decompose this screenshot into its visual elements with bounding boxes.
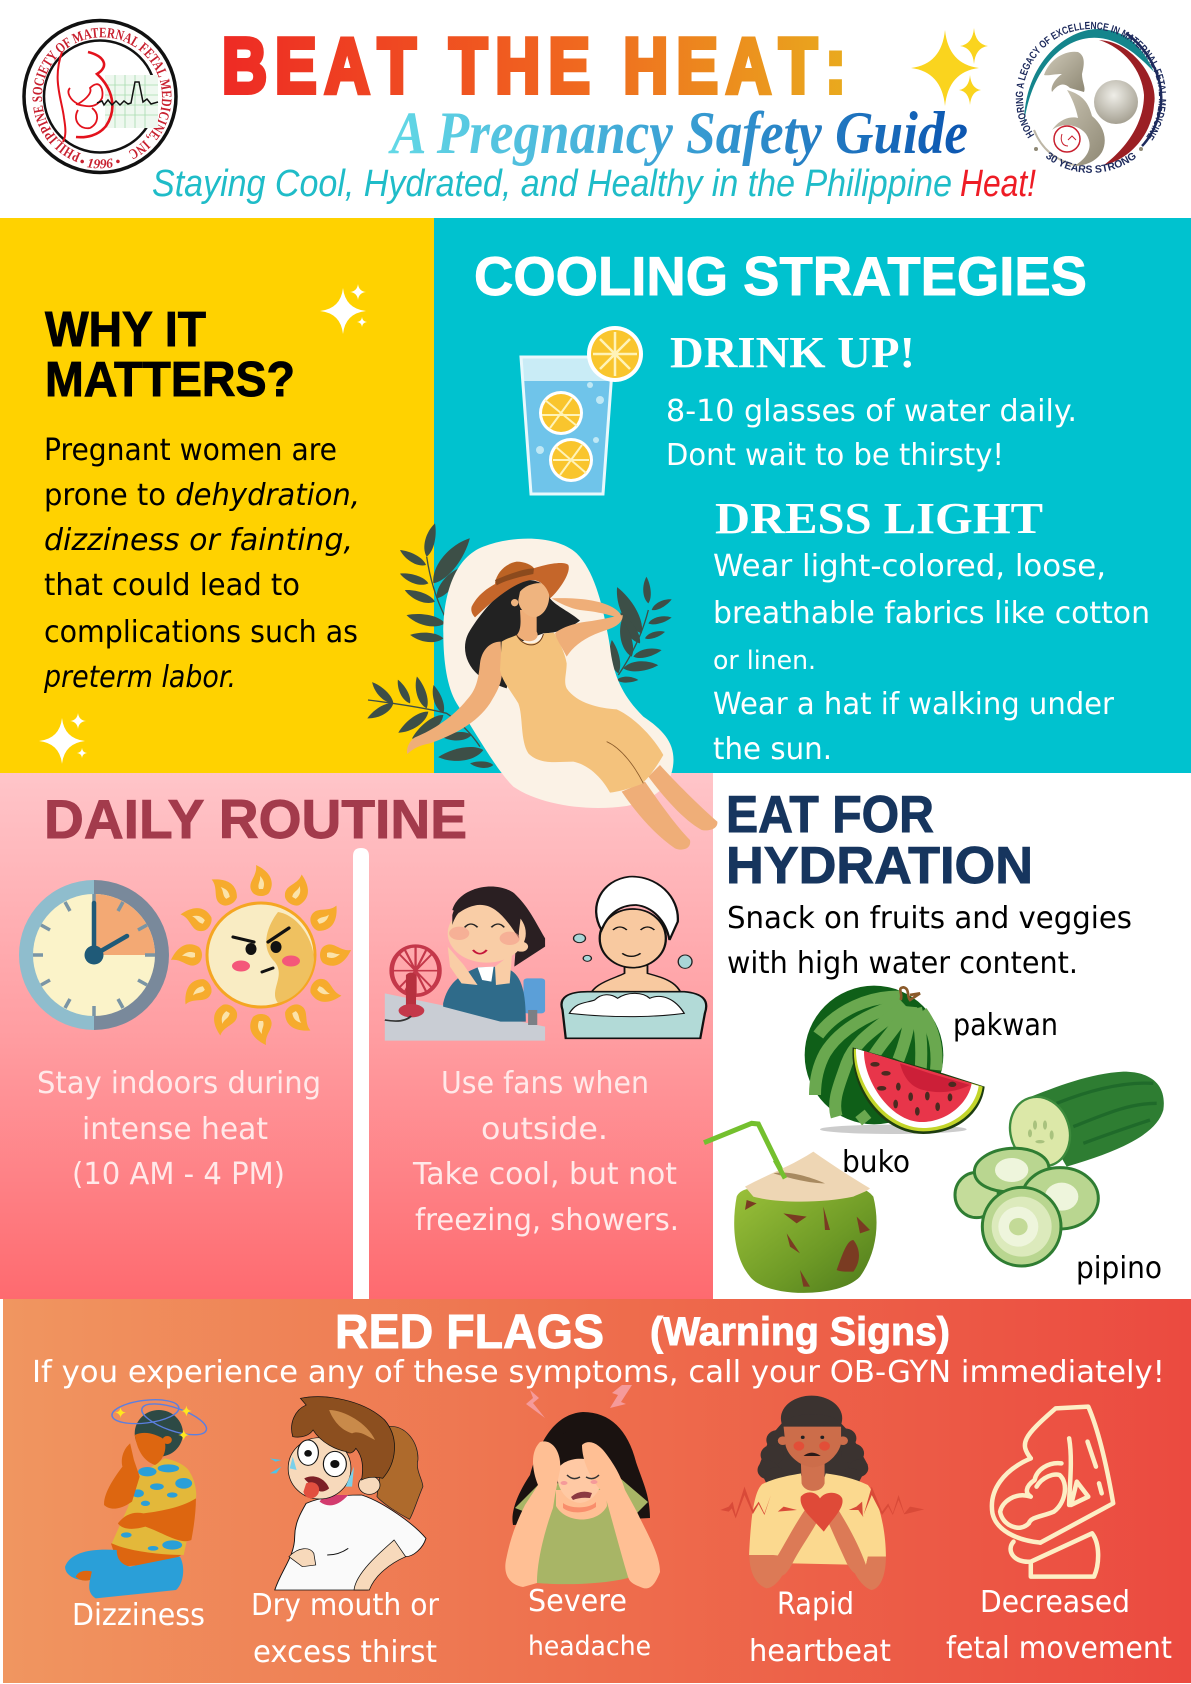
- heading: dress light: DRESS LIGHT: [715, 494, 1043, 543]
- panel: daily routine: [19, 788, 706, 1299]
- label: rapid heartbeat: heartbeat: [749, 1634, 891, 1669]
- icon: pregnant belly with fetus: [992, 1407, 1113, 1577]
- text: snack on fruits: [727, 901, 1132, 981]
- logo: 30 years strong: 30 YEARS STRONG: [1046, 152, 1136, 173]
- label: pipino: pipino: [1076, 1251, 1162, 1286]
- text: dress light body: the sun.: [713, 732, 832, 767]
- illustration: rapid heartbeat figure: [720, 1396, 924, 1590]
- text: use fans: freezing, showers.: [415, 1203, 679, 1238]
- text: why it matters body: Pregnant women are: [44, 433, 337, 468]
- text: why it matters body: preterm labor.: [43, 660, 236, 695]
- heading: eat for hydration: [726, 786, 1033, 895]
- panel: red flags: [32, 1306, 1172, 1670]
- illustration: coconut: [704, 1123, 877, 1293]
- illustration: woman with fan at desk: [385, 887, 545, 1041]
- label: dry mouth: excess thirst: [253, 1635, 437, 1670]
- text: use fans: outside.: [481, 1112, 608, 1147]
- label: dizziness: Dizziness: [72, 1598, 205, 1633]
- label: decreased fetal movement: fetal movement: [946, 1631, 1172, 1666]
- illustration: severe headache figure: [505, 1385, 660, 1588]
- illustration: cucumber: [955, 1072, 1164, 1266]
- text: stay indoors: Stay indoors during: [37, 1066, 321, 1101]
- heading: daily routine: DAILY ROUTINE: [44, 788, 467, 850]
- text: dress light body: breathable fabrics like cotton: [713, 596, 1150, 631]
- heading: eat for hydration: EAT FOR: [726, 786, 934, 844]
- label: decreased fetal movement: [946, 1585, 1172, 1666]
- text: stay indoors: (10 AM - 4 PM): [72, 1157, 285, 1192]
- panel: why it matters: [39, 284, 367, 764]
- logo: Philippine Society of Maternal Fetal Medicine: PHILIPPINE SOCIETY OF MATERNAL FETAL MEDICINE, INC: [32, 28, 172, 162]
- icon: clock: [19, 880, 169, 1030]
- tagline accent: Heat!: [960, 163, 1036, 205]
- logo: 30 years strong: HONORING A LEGACY OF EXCELLENCE IN MATERNAL-FETAL MEDICINE: [1016, 22, 1166, 141]
- text: use fans: Use fans when: [441, 1066, 649, 1101]
- heading: drink up: DRINK UP!: [670, 328, 915, 377]
- heading: why it matters: WHY IT: [45, 303, 206, 357]
- panel: eat for hydration: [704, 786, 1164, 1293]
- illustration: dry mouth figure: [270, 1397, 426, 1590]
- heading: why it matters: MATTERS?: [45, 353, 295, 407]
- illustration: relaxing woman with leaves: [366, 522, 717, 850]
- heading: warning signs: (Warning Signs): [650, 1310, 950, 1354]
- leaves: [366, 522, 673, 769]
- icon: angry sun: [171, 865, 351, 1045]
- panel: red flags background: [3, 1299, 1191, 1683]
- label: severe headache: headache: [528, 1631, 651, 1662]
- icon: yellow sparkles: [911, 28, 988, 106]
- panel: cooling strategies background: [434, 218, 1191, 773]
- label: dry mouth: [251, 1588, 440, 1670]
- label: pakwan: pakwan: [953, 1008, 1058, 1043]
- text: drink up body: [666, 394, 1077, 473]
- dress: [500, 633, 663, 793]
- panel: daily routine background: [0, 773, 713, 1299]
- text: drink up body: 8-10 glasses of water daily.: [666, 394, 1077, 429]
- text: dress light body: or linen.: [713, 646, 816, 676]
- label: rapid heartbeat: Rapid: [777, 1587, 854, 1622]
- text: why it matters body: that could lead to: [44, 568, 300, 603]
- header: [22, 18, 1166, 205]
- hat: [495, 562, 534, 586]
- text: drink up body: Dont wait to be thirsty!: [666, 438, 1004, 473]
- illustration: woman in bath: [562, 877, 706, 1038]
- raised arm: [552, 598, 623, 657]
- illustration: watermelon: [805, 986, 985, 1134]
- text: use fans: [412, 1066, 679, 1238]
- text: stay indoors: [37, 1066, 321, 1192]
- illustration: dizziness figure: [65, 1396, 211, 1598]
- panel: why it matters background: [0, 218, 434, 773]
- divider: [353, 848, 369, 1299]
- label: rapid heartbeat: [749, 1587, 891, 1669]
- heading: cooling strategies: COOLING STRATEGIES: [474, 245, 1087, 307]
- label: dry mouth: Dry mouth or: [251, 1588, 440, 1623]
- heading: why it matters: [45, 303, 295, 407]
- legs: [648, 765, 717, 830]
- title: BEAT THE HEAT:: [222, 22, 854, 109]
- neck and face: [517, 610, 538, 641]
- logo: Philippine Society of Maternal Fetal Medicine: • 1996 •: [80, 158, 120, 168]
- icon: white sparkles bottom: [39, 713, 87, 764]
- tagline: Staying Cool, Hydrated, and Healthy in the Philippine: [152, 163, 952, 205]
- text: dress light body: Wear light-colored, loose,: [713, 549, 1106, 584]
- text: red flags instruction: If you experience any of these symptoms, call your OB-GYN immediately!: [32, 1355, 1165, 1390]
- heading: red flags: RED FLAGS: [335, 1306, 604, 1359]
- text: why it matters body: [43, 433, 360, 695]
- icon: white sparkles top: [320, 284, 367, 334]
- icon: lemonade glass: [521, 326, 643, 494]
- text: use fans: Take cool, but not: [412, 1157, 677, 1192]
- heading: eat for hydration: HYDRATION: [726, 837, 1033, 895]
- label: severe headache: Severe: [528, 1584, 627, 1619]
- blob chair: [443, 539, 673, 808]
- text: why it matters body: dizziness or fainting,: [44, 523, 353, 558]
- subtitle script: A Pregnancy Safety Guide: [387, 100, 968, 166]
- text: dress light body: Wear a hat if walking under: [713, 687, 1115, 722]
- label: severe headache: [528, 1584, 651, 1662]
- text: stay indoors: intense heat: [82, 1112, 268, 1147]
- label: buko: buko: [842, 1145, 910, 1180]
- text: dress light body: [713, 549, 1150, 767]
- text: snack on fruits: with high water content.: [727, 946, 1078, 981]
- panel: cooling strategies: [474, 245, 1150, 767]
- text: why it matters body: complications such as: [44, 615, 358, 650]
- text: snack on fruits: Snack on fruits and veggies: [727, 901, 1132, 936]
- label: decreased fetal movement: Decreased: [980, 1585, 1130, 1620]
- text: why it matters body: prone to dehydration,: [44, 478, 360, 513]
- left arm: [407, 642, 502, 754]
- hair: [465, 580, 580, 688]
